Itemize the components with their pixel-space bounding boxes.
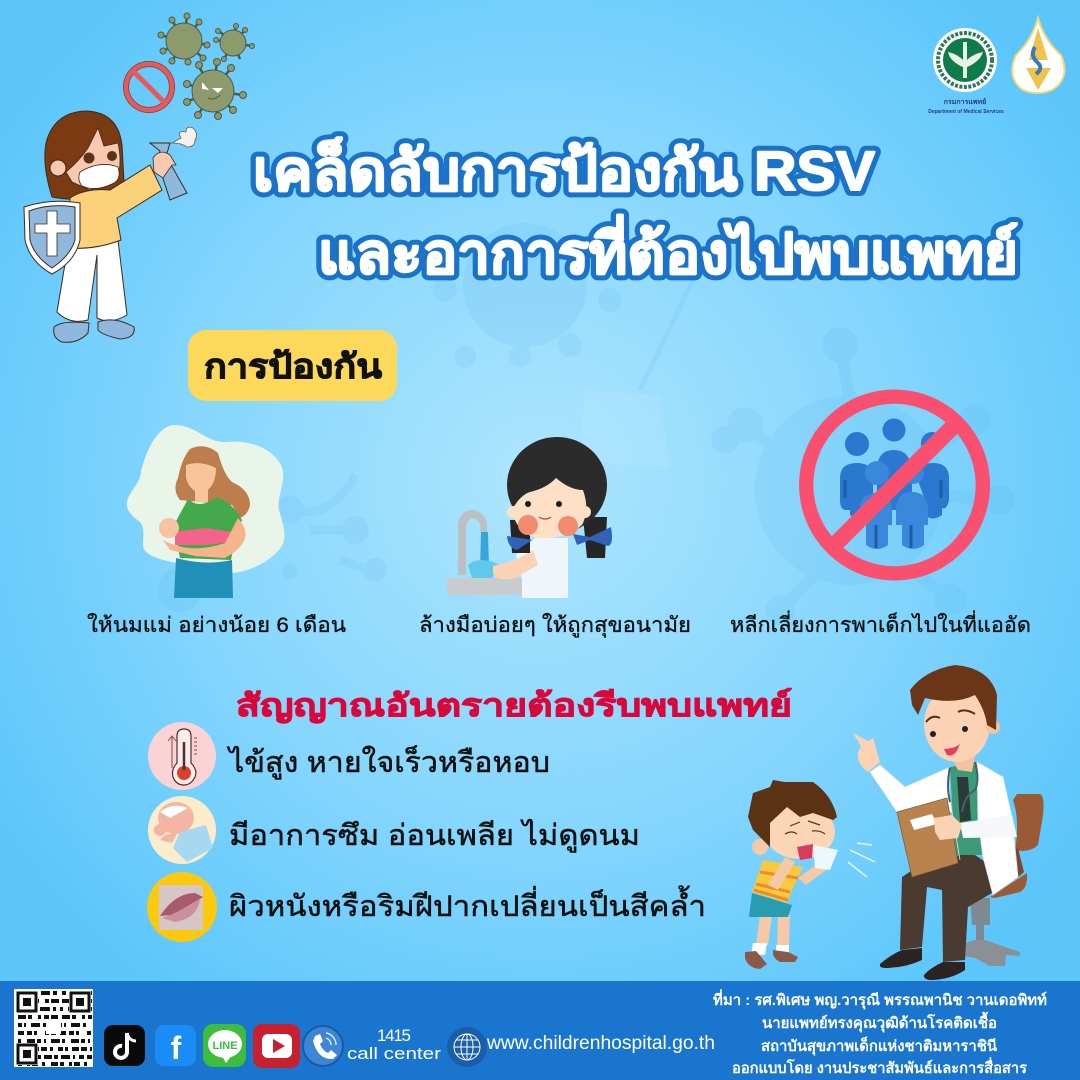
coat xyxy=(870,762,1018,895)
sweater xyxy=(68,165,162,248)
faint syringe body xyxy=(580,390,670,470)
legs xyxy=(900,855,992,962)
website: www.childrenhospital.go.th xyxy=(486,1033,715,1054)
clipboard xyxy=(897,798,958,877)
icon: YouTube xyxy=(253,1024,300,1068)
faint background viruses and syringe xyxy=(158,223,1015,625)
icon: sleepy baby xyxy=(148,796,216,864)
hair xyxy=(748,780,837,847)
text: symptom 3: ผิวหนังหรือริมฝีปากเปลี่ยนเป็นสีคล้ำ xyxy=(229,885,706,923)
face xyxy=(66,128,120,190)
hair xyxy=(45,111,124,199)
icon: viruses xyxy=(158,13,254,120)
sneeze lines xyxy=(848,843,875,877)
spray puff xyxy=(172,127,197,147)
arms xyxy=(768,857,826,890)
panel: footer xyxy=(0,981,1080,1080)
illustration: mother breastfeeding xyxy=(127,425,285,598)
spray bottle xyxy=(150,143,187,200)
source credits: สถาบันสุขภาพเด็กแห่งชาติมหาราชินี xyxy=(761,1036,998,1056)
illustration: girl with spray and shield xyxy=(24,13,254,342)
pointing hand xyxy=(853,733,880,772)
icon: TikTok xyxy=(104,1025,145,1066)
caption: wash hands: ล้างมือบ่อยๆ ให้ถูกสุขอนามัย xyxy=(419,613,691,638)
caption: breastfeed: ให้นมแม่ อย่างน้อย 6 เดือน xyxy=(87,613,346,637)
title xyxy=(253,136,1018,285)
source credits: นายแพทย์ทรงคุณวุฒิด้านโรคติดเชื้อ xyxy=(762,1011,997,1033)
title: เคล็ดลับการป้องกัน RSV xyxy=(253,136,875,202)
QR code xyxy=(14,989,93,1067)
icon: no crowds xyxy=(799,390,990,580)
head xyxy=(765,805,835,859)
mask xyxy=(79,164,119,189)
shoes xyxy=(880,948,922,968)
icon: globe xyxy=(447,1027,487,1067)
text: symptom 1: ไข้สูง หายใจเร็วหรือหอบ xyxy=(227,744,550,780)
call center text: 1415 xyxy=(377,1026,411,1045)
shirt and tie xyxy=(950,762,982,855)
logo: Ministry of Public Health: Department of Medical Services xyxy=(928,109,1004,115)
panel: prevention heading xyxy=(188,330,397,401)
source credits: ที่มา : รศ.พิเศษ พญ.วารุณี พรรณพานิช วานเดอพิทท์ xyxy=(713,989,1047,1010)
logo: Ministry of Public Health: กรมการแพทย์ xyxy=(944,97,986,106)
boy legs xyxy=(756,915,790,950)
head xyxy=(924,686,990,762)
illustration: girl washing hands xyxy=(447,437,612,598)
chair xyxy=(1013,794,1044,851)
stethoscope xyxy=(948,762,978,812)
logo: Ministry of Public Health xyxy=(928,28,1004,115)
boy shoes xyxy=(745,951,767,969)
text: symptom 2: มีอาการซึม อ่อนเพลีย ไม่ดูดนม xyxy=(229,818,640,853)
illustration: doctor xyxy=(853,665,1044,980)
logo: royal drop emblem xyxy=(1012,18,1064,93)
hand xyxy=(153,152,176,178)
heading: danger signs: สัญญาณอันตรายต้องรีบพบแพทย์ xyxy=(236,688,792,724)
shorts xyxy=(749,893,792,917)
icon: LINE: LINE xyxy=(212,1040,238,1052)
source credits: ออกแบบโดย งานประชาสัมพันธ์และการสื่อสาร xyxy=(732,1057,1028,1077)
tissue xyxy=(813,845,838,870)
doctor hair xyxy=(910,665,997,730)
icon: prohibition sign xyxy=(126,64,172,110)
icon: thermometer xyxy=(148,722,216,790)
caption: avoid crowds: หลีกเลี่ยงการพาเด็กไปในที่แออัด xyxy=(730,610,1031,637)
title: และอาการที่ต้องไปพบแพทย์ xyxy=(318,214,1018,285)
call center text: call center xyxy=(347,1044,441,1063)
holding hand xyxy=(934,815,962,840)
title: เคล็ดลับการป้องกัน RSV xyxy=(253,136,875,202)
legs xyxy=(57,240,127,321)
illustration: sneezing boy xyxy=(745,780,875,969)
icon: Facebook xyxy=(155,1025,196,1066)
icon: LINE xyxy=(203,1024,246,1067)
neck xyxy=(950,755,975,772)
icon: phone xyxy=(303,1026,343,1066)
call center text xyxy=(347,1026,441,1063)
source credits xyxy=(713,989,1047,1077)
striped shirt xyxy=(752,860,803,903)
title: และอาการที่ต้องไปพบแพทย์ xyxy=(318,214,1018,285)
panel: prevention heading: การป้องกัน xyxy=(204,348,382,386)
shoes xyxy=(54,322,89,342)
icon: Facebook: f xyxy=(171,1030,182,1066)
shield xyxy=(24,201,80,274)
icon: cyanotic lips xyxy=(147,872,217,942)
